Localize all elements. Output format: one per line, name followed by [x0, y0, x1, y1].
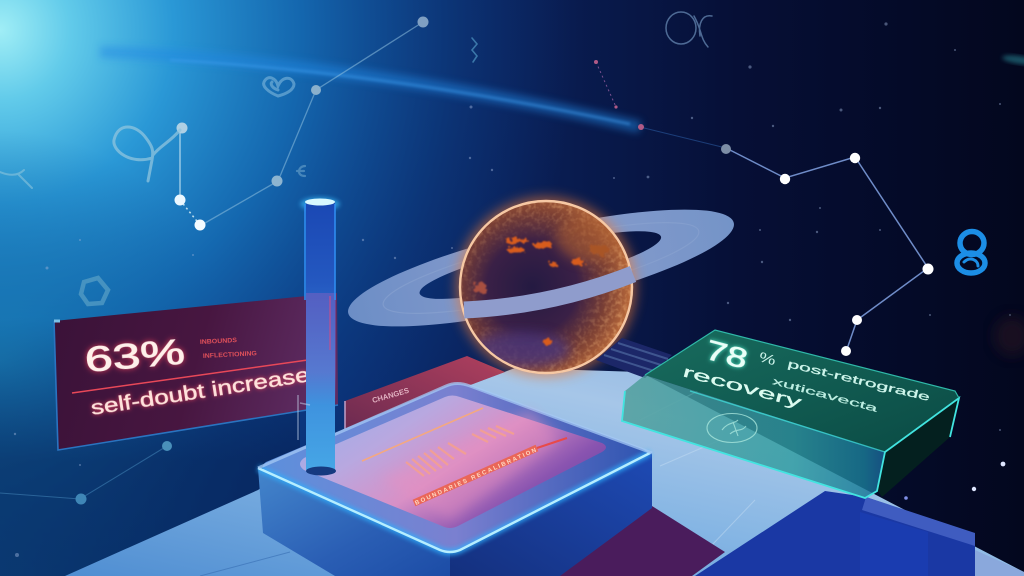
floor platform [65, 368, 1024, 576]
maroon floor strip [540, 506, 725, 576]
stat card: 78% post-retrograde recovery [622, 330, 959, 498]
stat label line 3: recovery [681, 363, 804, 412]
small red caption: INFLECTIONING [203, 350, 257, 360]
card side face [877, 398, 959, 497]
small red caption: INBOUNDS [200, 337, 238, 346]
icon: brain badge [707, 414, 757, 442]
small red caption [200, 337, 257, 360]
constellation: upper left [174, 16, 428, 230]
constellation: right [721, 144, 934, 356]
card front face [622, 375, 885, 498]
ring front band [464, 274, 633, 310]
stat label: self-doubt increase [89, 364, 311, 420]
ring behind planet [340, 186, 742, 350]
card glowing edges [622, 330, 959, 498]
constellation: lower left [0, 441, 172, 504]
main pedestal device: BOUNDARIES RECALIBRATION [414, 448, 537, 507]
planet glow [456, 197, 636, 377]
bright stars lower right [904, 462, 1005, 500]
vent stripes [596, 338, 672, 378]
stat value 63%: 63% [83, 332, 186, 380]
faint reddish cloud at right edge [994, 316, 1024, 356]
stat label line 1: post-retrograde [786, 358, 931, 404]
stat label line 2: xuticavecta [771, 376, 879, 415]
screen red bar [414, 448, 537, 503]
card top face [645, 330, 959, 452]
glowing tube [298, 197, 340, 476]
small maroon back panel [345, 356, 505, 432]
icon: zodiac symbols [0, 12, 985, 304]
dark blue block lower right [695, 491, 1024, 576]
pedestal top [262, 384, 648, 551]
stat value 78%: 78 [702, 334, 751, 375]
inner screen [300, 396, 606, 528]
constellation: faint pink dots [594, 60, 644, 130]
stat card: 78% post-retrograde recovery: % [757, 348, 778, 368]
planet [459, 200, 633, 374]
small maroon back panel: CHANGES [371, 386, 410, 405]
main pedestal device [258, 384, 652, 576]
screen text lines [362, 408, 483, 461]
stat card: 63% self-doubt increase [54, 293, 338, 450]
pedestal front faces [258, 468, 450, 576]
pedestal glow edge [258, 453, 650, 552]
